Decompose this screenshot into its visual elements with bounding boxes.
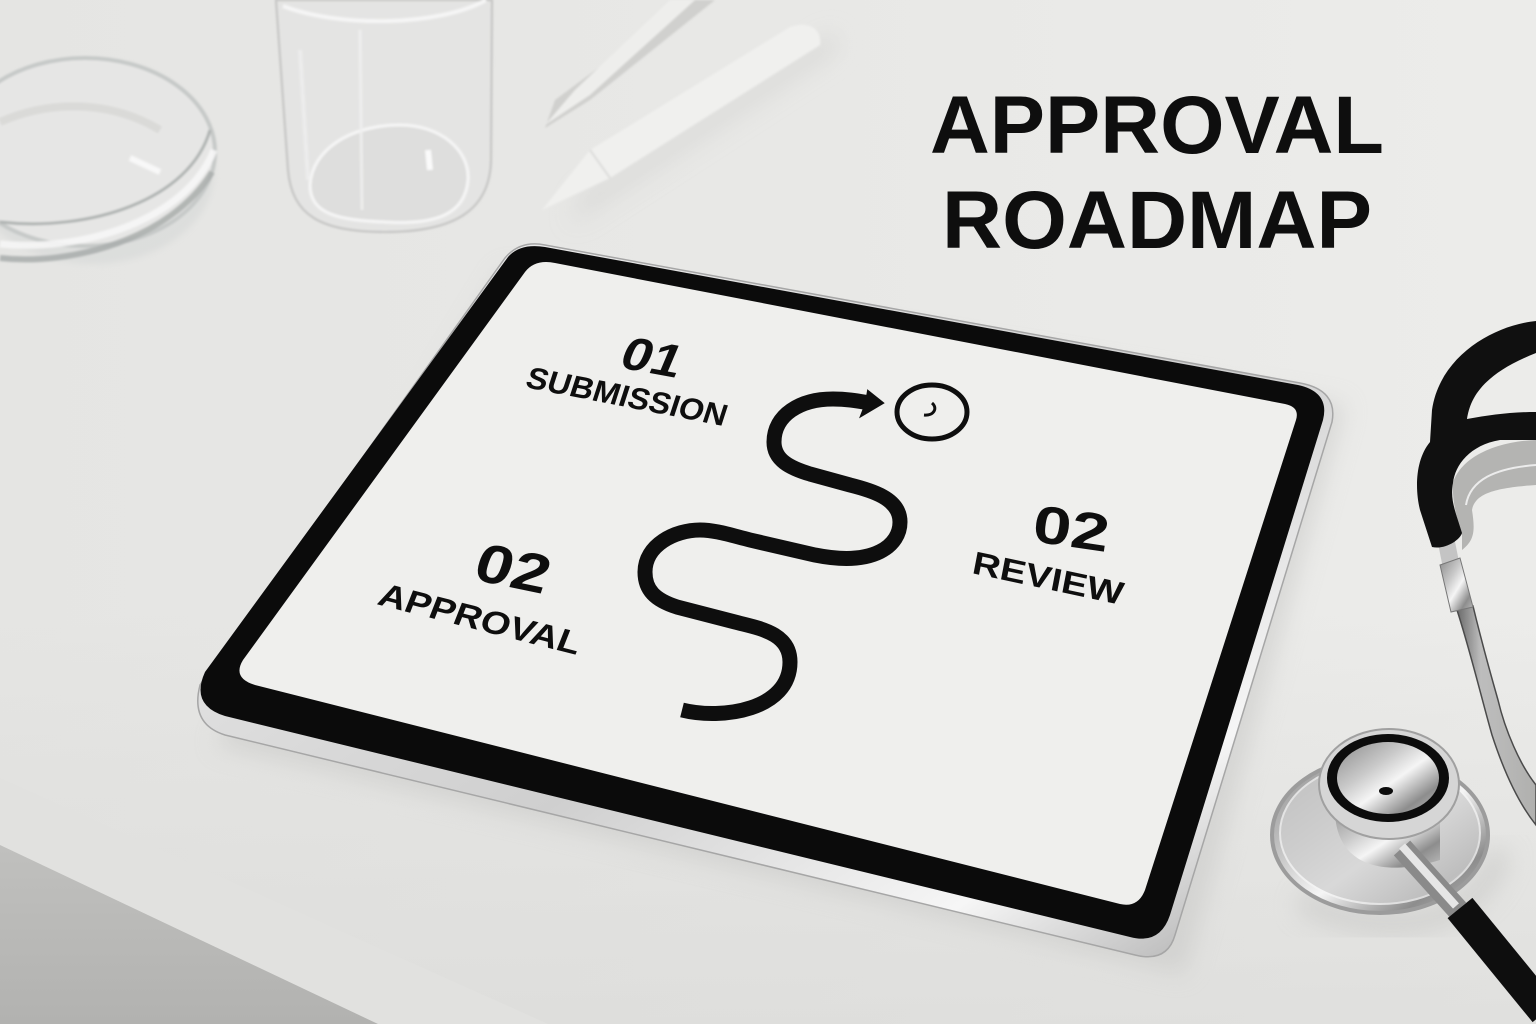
title: APPROVAL (930, 80, 1384, 171)
step 02 number (right): 02 (1029, 494, 1113, 564)
connector (1446, 540, 1452, 570)
clock icon (897, 385, 967, 439)
chest piece head (1319, 729, 1459, 839)
title: ROADMAP (942, 175, 1372, 266)
tablet screen (239, 262, 1297, 905)
pens (542, 0, 840, 225)
grey inner yoke (1453, 440, 1536, 550)
step 01 label: submission: SUBMISSION (522, 360, 732, 433)
step label: review: REVIEW (970, 545, 1127, 612)
black tubing (1417, 321, 1536, 548)
glass beaker (276, 0, 492, 232)
tablet silver body (198, 244, 1333, 957)
step 01 number: 01 (613, 327, 692, 387)
petri dish (0, 58, 215, 264)
tablet black bezel (200, 246, 1324, 939)
metal tube (1457, 606, 1536, 825)
tablet (198, 244, 1345, 975)
stethoscope shadow (1300, 850, 1500, 923)
lower black tube (1460, 908, 1536, 1012)
tablet shadow (215, 270, 1345, 975)
step 02 label: approval: APPROVAL (373, 576, 587, 662)
chest piece base (1272, 757, 1488, 913)
desk front edge (0, 778, 548, 1024)
title (930, 80, 1384, 266)
winding roadmap path with arrow (645, 391, 900, 714)
stem (1402, 848, 1458, 910)
stethoscope (1272, 321, 1536, 1012)
step 02 number (left): 02 (467, 532, 559, 605)
